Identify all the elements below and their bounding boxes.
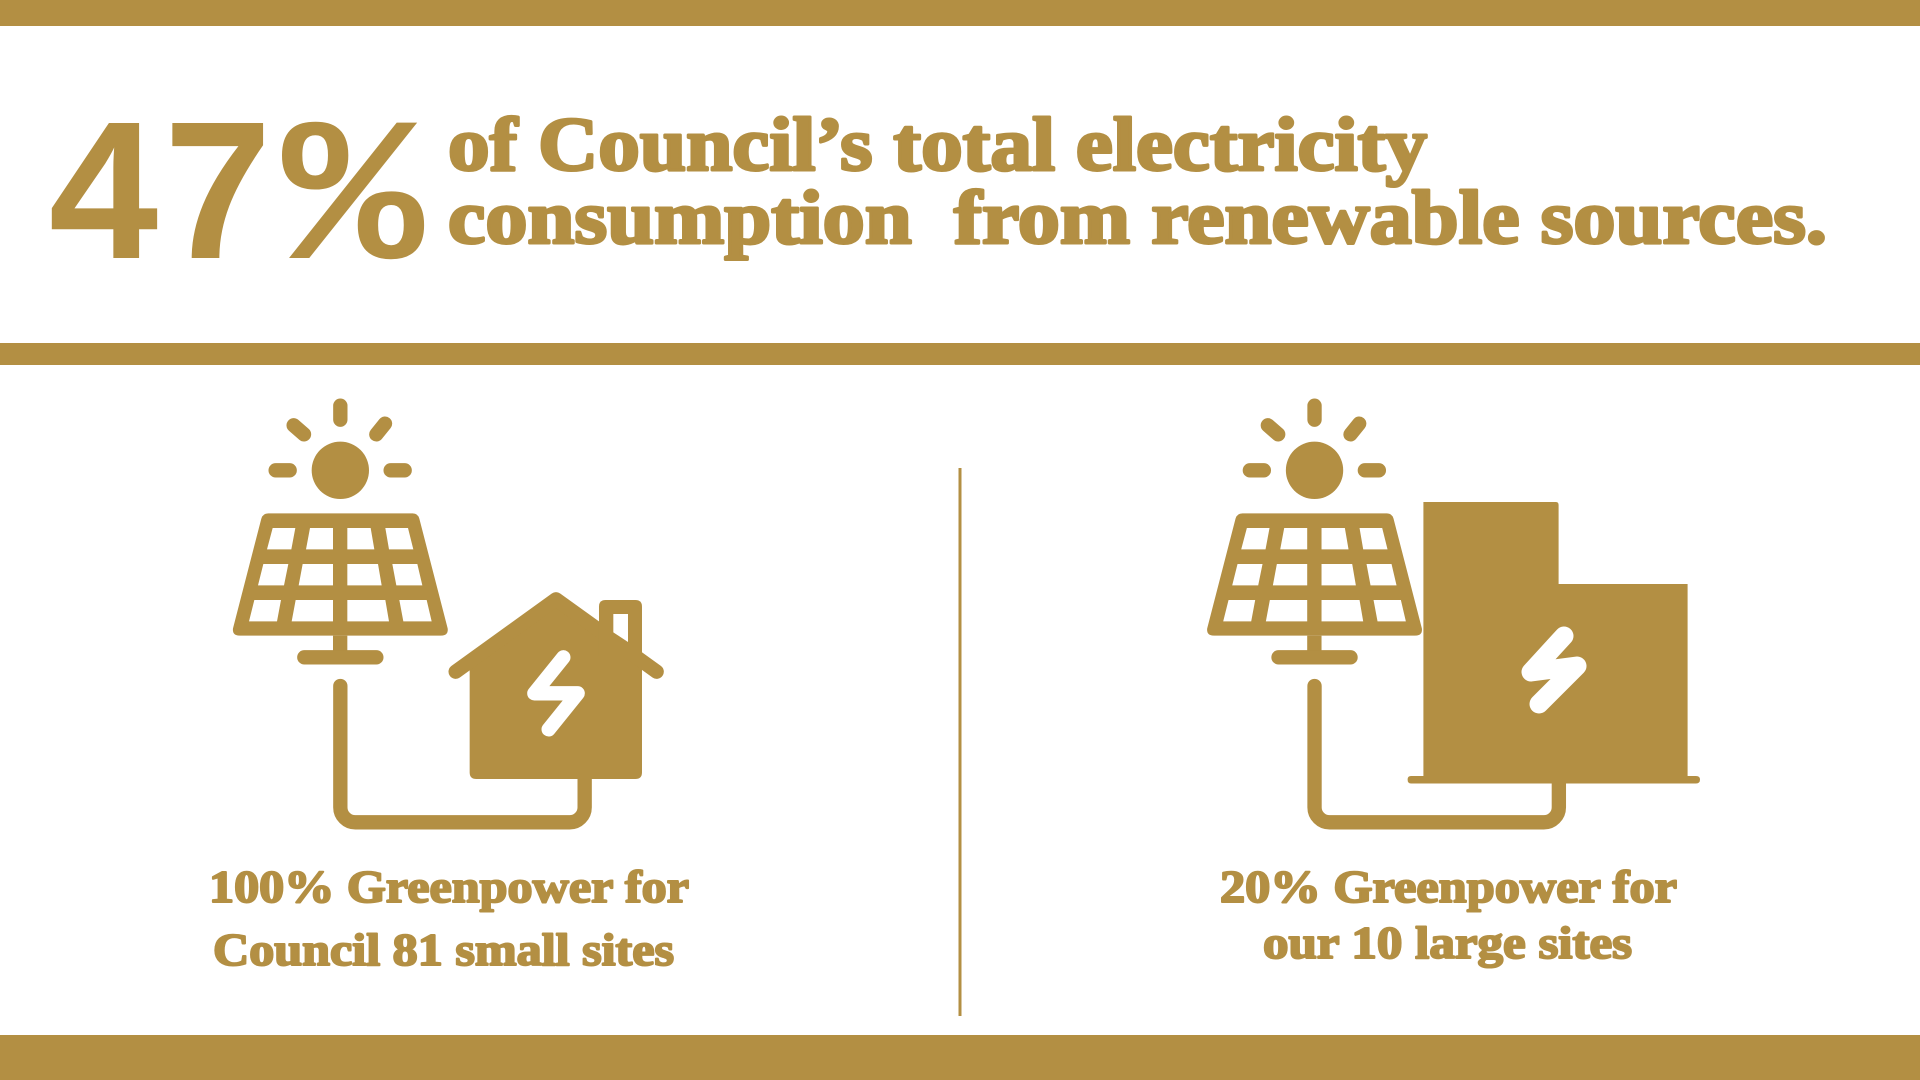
big statistic: 47%: [45, 87, 425, 320]
icon: solar panel: [1207, 513, 1422, 657]
caption: large sites: our 10 large sites: [1263, 918, 1632, 968]
icon: sun: [1250, 406, 1379, 499]
big statistic: 47%: 4: [45, 87, 163, 320]
icon: buildings: [1408, 502, 1700, 784]
top band: [0, 0, 1920, 26]
middle band: [0, 343, 1920, 365]
caption: small sites: 100% Greenpower for: [209, 862, 689, 912]
caption: small sites: Council 81 small sites: [213, 925, 674, 975]
big statistic: 47%: %: [282, 87, 425, 320]
icon: solar panel powering large buildings: [1207, 406, 1700, 822]
icon: solar panel powering house: [233, 406, 657, 822]
caption: large sites: [1220, 862, 1677, 968]
caption: large sites: 20% Greenpower for: [1220, 862, 1677, 912]
caption: small sites: [209, 862, 689, 975]
icon: solar panel: [233, 513, 448, 657]
cable: [1315, 686, 1559, 822]
headline: of Council’s total electricity: [448, 103, 1427, 187]
headline: [448, 103, 1827, 260]
headline: consumption from renewable sources.: [448, 176, 1827, 260]
icon: house: [456, 599, 657, 779]
icon: sun: [276, 406, 405, 499]
big statistic: 47%: 7: [160, 87, 276, 320]
divider: [958, 468, 962, 1016]
bottom band: [0, 1035, 1920, 1080]
cable: [340, 686, 585, 822]
